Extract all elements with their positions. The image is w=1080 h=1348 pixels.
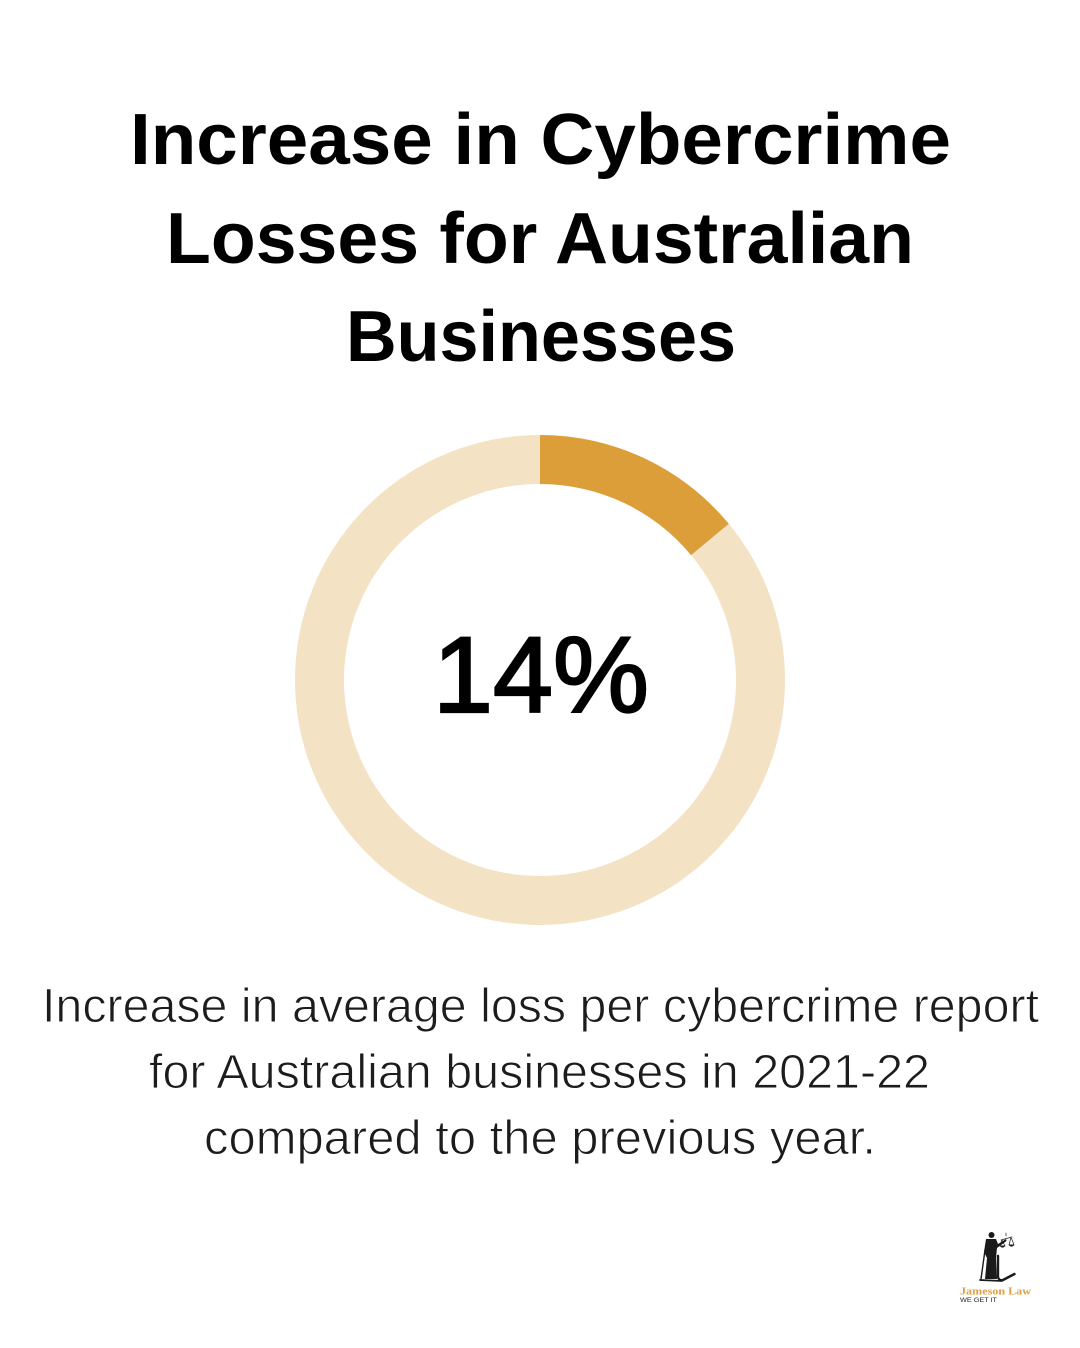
title: Increase in Cybercrime <box>130 100 951 180</box>
description text <box>42 980 1039 1165</box>
donut track <box>320 460 760 900</box>
logo: Jameson Law <box>960 1232 1031 1304</box>
icon: lady justice <box>980 1232 1014 1281</box>
donut chart: 14% <box>320 435 760 900</box>
title: Businesses <box>346 297 736 377</box>
description text: Increase in average loss per cybercrime report <box>42 980 1039 1033</box>
logo name: Jameson Law <box>960 1286 1031 1298</box>
description text: compared to the previous year. <box>204 1112 876 1165</box>
center value: 14% <box>433 614 649 735</box>
logo tagline: WE GET IT <box>960 1297 997 1304</box>
description text: for Australian businesses in 2021-22 <box>149 1046 930 1099</box>
donut highlighted segment <box>540 435 729 555</box>
title <box>130 100 951 377</box>
title: Losses for Australian <box>166 199 914 279</box>
